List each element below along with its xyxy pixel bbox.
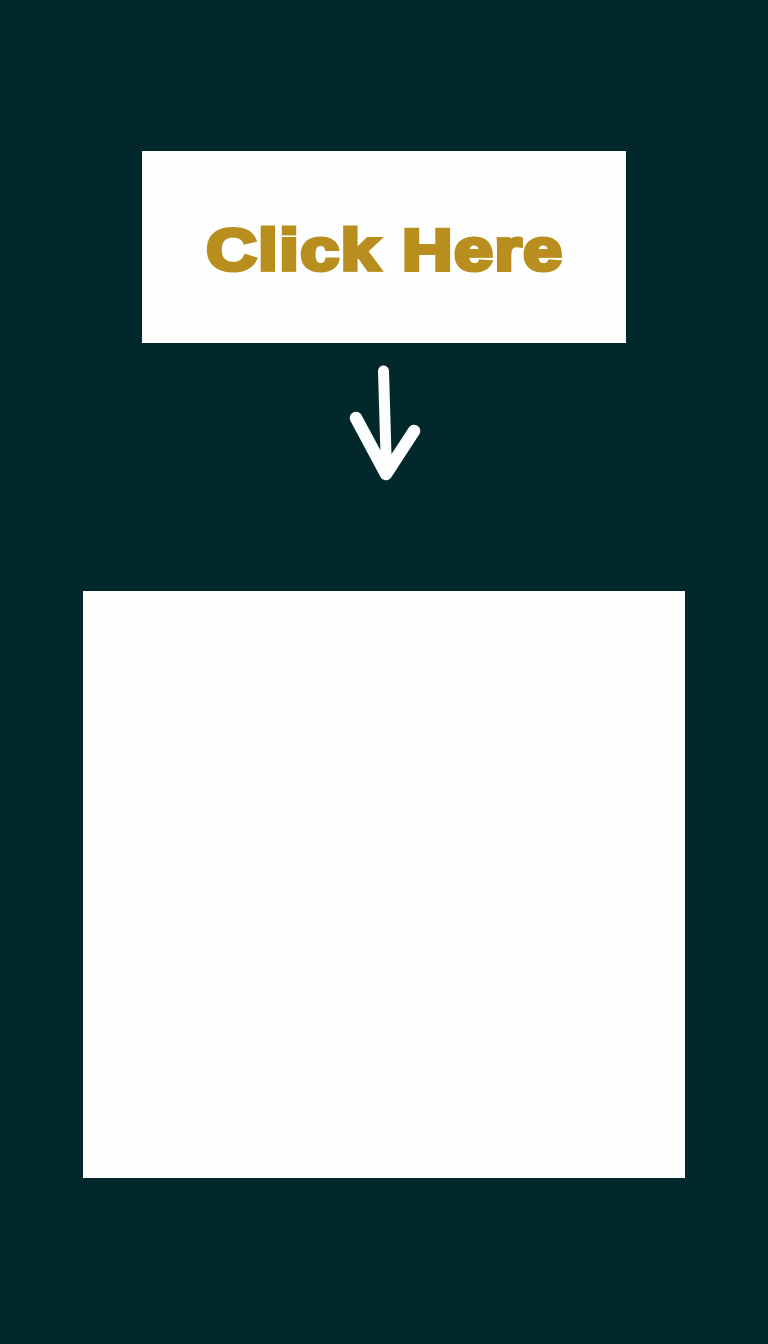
button: Click Here xyxy=(142,151,626,343)
button: Click Here: Click Here xyxy=(206,218,564,283)
panel: blank white content area xyxy=(83,591,685,1178)
icon: down arrow xyxy=(350,366,420,480)
